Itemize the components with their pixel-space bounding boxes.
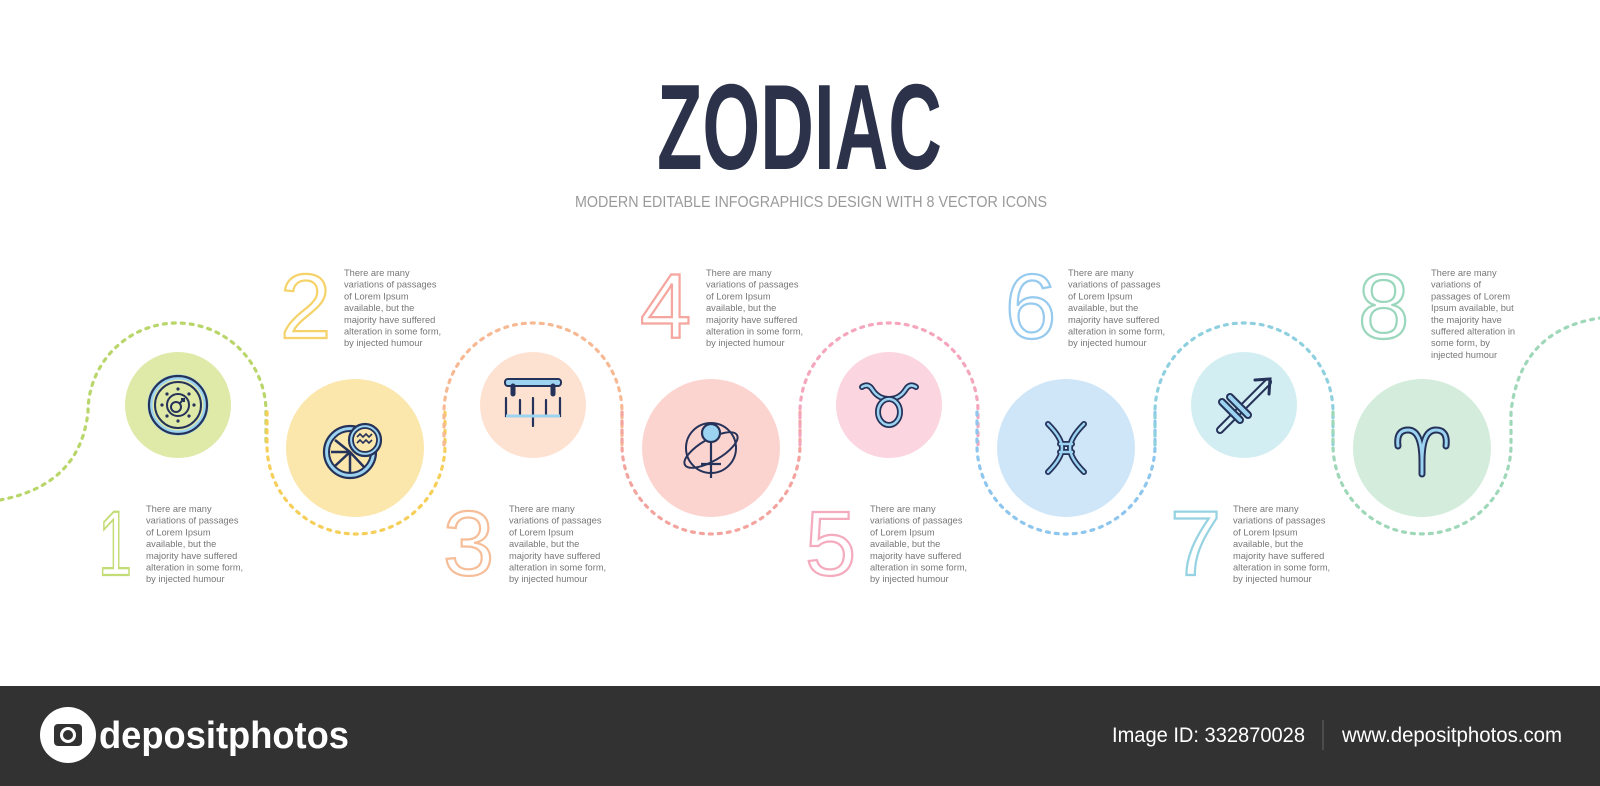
description texts: by injected humour bbox=[509, 574, 588, 584]
description texts: some form, by bbox=[1431, 338, 1490, 348]
description texts: alteration in some form, bbox=[1233, 562, 1330, 572]
numbers: 8 bbox=[1358, 256, 1409, 358]
description texts: the majority have bbox=[1431, 315, 1502, 325]
description texts: alteration in some form, bbox=[870, 562, 967, 572]
circle 6 with icon bbox=[997, 379, 1135, 517]
description texts: injected humour bbox=[1431, 350, 1497, 360]
description texts: majority have suffered bbox=[1233, 551, 1324, 561]
subtitle: MODERN EDITABLE INFOGRAPHICS DESIGN WITH 8 VECTOR ICONS bbox=[575, 194, 1047, 211]
description texts: majority have suffered bbox=[146, 551, 237, 561]
description texts: by injected humour bbox=[870, 574, 949, 584]
description texts: by injected humour bbox=[1233, 574, 1312, 584]
description texts bbox=[146, 268, 1515, 584]
circle 8 with icon bbox=[1353, 379, 1491, 517]
description texts: of Lorem Ipsum bbox=[1233, 527, 1298, 537]
description texts: alteration in some form, bbox=[344, 326, 441, 336]
description texts: of Lorem Ipsum bbox=[706, 291, 771, 301]
description texts: passages of Lorem bbox=[1431, 291, 1510, 301]
description texts: available, but the bbox=[1068, 303, 1138, 313]
dashed wave timeline bbox=[0, 318, 1600, 534]
description texts: variations of passages bbox=[146, 516, 239, 526]
footer url: www.depositphotos.com bbox=[1341, 724, 1562, 747]
description texts: available, but the bbox=[146, 539, 216, 549]
description texts: variations of passages bbox=[1233, 516, 1326, 526]
description texts: majority have suffered bbox=[509, 551, 600, 561]
footer logo text: depositphotos bbox=[99, 715, 349, 757]
description texts: variations of passages bbox=[706, 280, 799, 290]
description texts: available, but the bbox=[1233, 539, 1303, 549]
numbers: 1 bbox=[98, 493, 132, 595]
description texts: There are many bbox=[146, 504, 212, 514]
description texts: There are many bbox=[509, 504, 575, 514]
description texts: variations of passages bbox=[509, 516, 602, 526]
circle 7 with icon bbox=[1191, 352, 1297, 458]
footer bar bbox=[0, 686, 1600, 786]
title: ZODIAC bbox=[657, 59, 942, 195]
footer image id: Image ID: 332870028 bbox=[1112, 724, 1305, 747]
footer logo icon bbox=[40, 707, 96, 763]
description texts: majority have suffered bbox=[870, 551, 961, 561]
description texts: alteration in some form, bbox=[146, 562, 243, 572]
description texts: There are many bbox=[870, 504, 936, 514]
circle 3 with icon bbox=[480, 352, 586, 458]
description texts: by injected humour bbox=[344, 338, 423, 348]
numbers: 6 bbox=[1005, 256, 1056, 358]
description texts: alteration in some form, bbox=[706, 326, 803, 336]
description texts: variations of passages bbox=[870, 516, 963, 526]
description texts: Ipsum available, but bbox=[1431, 303, 1514, 313]
description texts: by injected humour bbox=[706, 338, 785, 348]
numbers: 3 bbox=[443, 493, 494, 595]
description texts: of Lorem Ipsum bbox=[1068, 291, 1133, 301]
description texts: There are many bbox=[1431, 268, 1497, 278]
description texts: There are many bbox=[706, 268, 772, 278]
circle 1 with icon bbox=[125, 352, 231, 458]
numbers: 7 bbox=[1170, 493, 1221, 595]
description texts: of Lorem Ipsum bbox=[344, 291, 409, 301]
description texts: by injected humour bbox=[1068, 338, 1147, 348]
description texts: by injected humour bbox=[146, 574, 225, 584]
description texts: variations of bbox=[1431, 280, 1482, 290]
description texts: majority have suffered bbox=[706, 315, 797, 325]
numbers bbox=[98, 256, 1409, 595]
description texts: of Lorem Ipsum bbox=[870, 527, 935, 537]
description texts: variations of passages bbox=[344, 280, 437, 290]
circle 4 with icon bbox=[642, 379, 780, 517]
description texts: There are many bbox=[1068, 268, 1134, 278]
description texts: available, but the bbox=[870, 539, 940, 549]
numbers: 2 bbox=[280, 256, 331, 358]
description texts: majority have suffered bbox=[1068, 315, 1159, 325]
description texts: available, but the bbox=[344, 303, 414, 313]
description texts: There are many bbox=[1233, 504, 1299, 514]
circle 5 with icon bbox=[836, 352, 942, 458]
description texts: alteration in some form, bbox=[1068, 326, 1165, 336]
description texts: variations of passages bbox=[1068, 280, 1161, 290]
numbers: 4 bbox=[640, 256, 691, 358]
description texts: of Lorem Ipsum bbox=[509, 527, 574, 537]
circle 2 with icon bbox=[286, 379, 424, 517]
description texts: There are many bbox=[344, 268, 410, 278]
description texts: suffered alteration in bbox=[1431, 326, 1515, 336]
description texts: alteration in some form, bbox=[509, 562, 606, 572]
description texts: available, but the bbox=[509, 539, 579, 549]
numbers: 5 bbox=[805, 493, 856, 595]
description texts: of Lorem Ipsum bbox=[146, 527, 211, 537]
description texts: majority have suffered bbox=[344, 315, 435, 325]
description texts: available, but the bbox=[706, 303, 776, 313]
